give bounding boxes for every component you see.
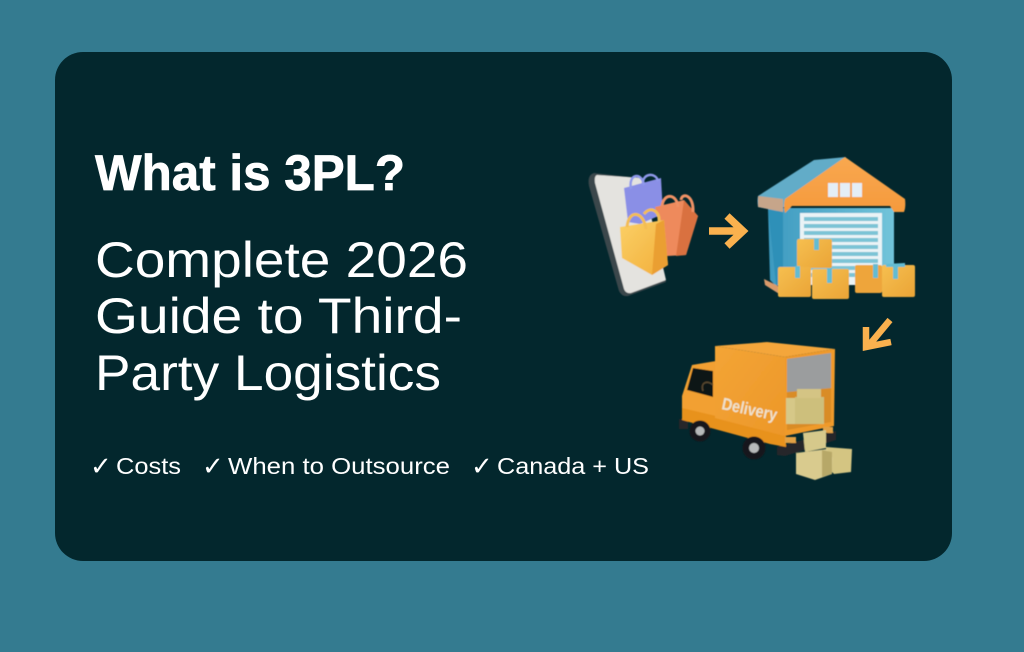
walls — [768, 208, 894, 286]
rear bumper — [777, 431, 836, 456]
cargo in truck — [795, 397, 824, 424]
panel: dark card — [55, 52, 952, 561]
checklist — [90, 452, 649, 482]
rear — [785, 349, 835, 436]
roof windows — [828, 183, 838, 197]
cargo top — [715, 342, 835, 357]
arrow: to delivery truck — [866, 320, 891, 347]
checklist: When to Outsource — [228, 453, 450, 479]
subtitle: Party Logistics — [95, 345, 441, 401]
arrow: to warehouse — [709, 216, 743, 246]
wheels — [690, 420, 710, 442]
base — [764, 279, 790, 297]
rear interior — [787, 387, 831, 430]
tail lights — [785, 437, 796, 443]
subtitle: Guide to Third- — [95, 288, 462, 344]
checklist: Costs — [116, 453, 181, 479]
yellow bag — [620, 220, 668, 275]
cab — [682, 361, 716, 416]
boxes — [797, 239, 832, 268]
checklist: Canada + US — [497, 453, 649, 479]
roof blue side — [758, 157, 846, 211]
roof orange — [784, 157, 905, 213]
checklist: ✓ — [471, 452, 493, 482]
subtitle — [95, 232, 468, 401]
lower body — [682, 408, 786, 447]
stacked boxes — [803, 430, 826, 452]
label: delivery: Delivery — [720, 394, 779, 425]
roller door — [800, 213, 882, 285]
cargo body side — [715, 346, 785, 436]
roller shutter — [787, 353, 831, 392]
title: What is 3PL? — [95, 145, 405, 201]
orange bag — [655, 200, 698, 256]
subtitle: Complete 2026 — [95, 232, 468, 288]
icon: warehouse with boxes — [758, 157, 915, 299]
checklist: ✓ — [202, 452, 224, 482]
icon: phone with shopping bags — [589, 173, 698, 296]
blue bag — [624, 178, 663, 224]
icon: delivery truck with boxes — [679, 342, 852, 480]
checklist: ✓ — [90, 452, 112, 482]
